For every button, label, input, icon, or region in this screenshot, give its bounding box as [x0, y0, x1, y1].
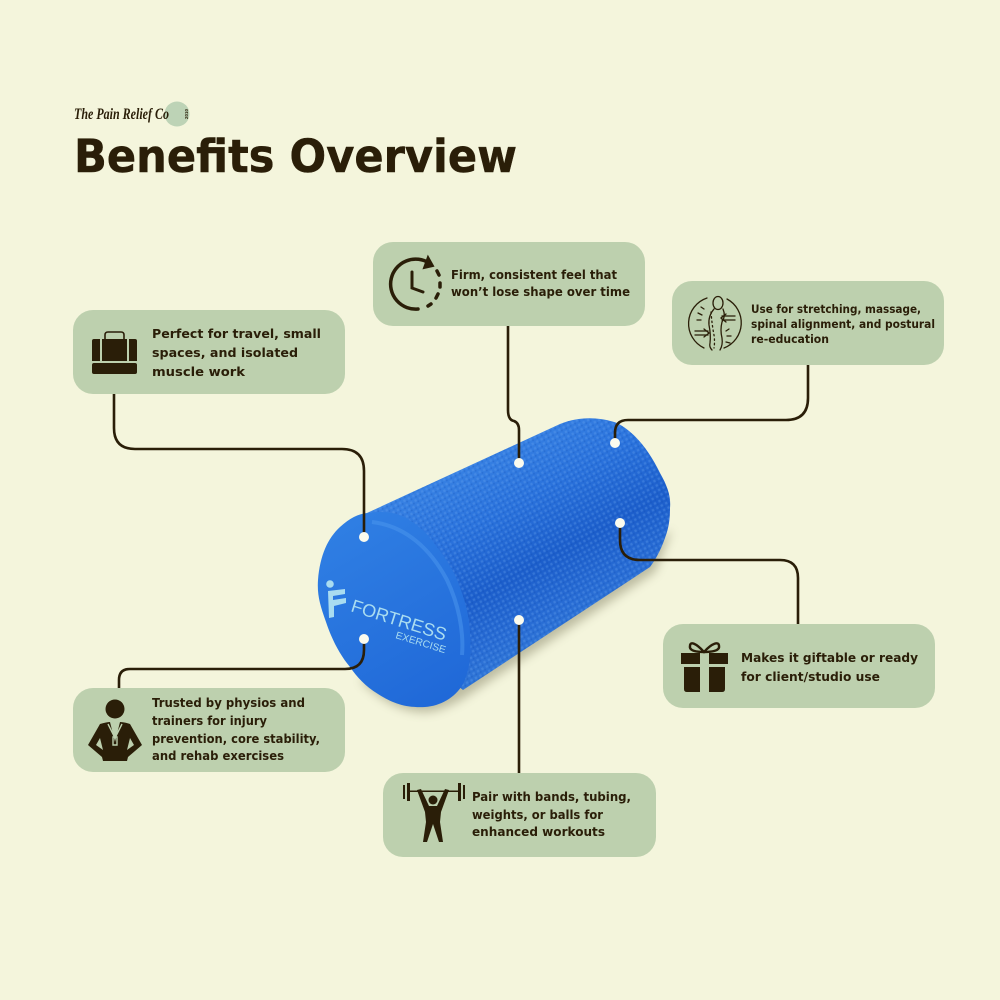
- text: pair with weights: weights, or balls for: [472, 807, 604, 822]
- panel: gift: [663, 624, 935, 708]
- text: pair with weights: enhanced workouts: [472, 824, 605, 839]
- text: travel: spaces, and isolated: [152, 345, 298, 360]
- text: stretching: [751, 302, 935, 346]
- icon: spine: [689, 296, 741, 350]
- connector: travel: [114, 394, 364, 537]
- text: trusted: Trusted by physios and: [152, 695, 305, 710]
- text: travel: Perfect for travel, small: [152, 326, 321, 341]
- text: stretching: re-education: [751, 332, 829, 346]
- text: pair with weights: [472, 789, 631, 839]
- text: firm feel: Firm, consistent feel that: [451, 267, 617, 282]
- icon: clock: [391, 257, 440, 309]
- connector: gift: [620, 523, 798, 624]
- panel: trusted: [73, 688, 345, 772]
- panel: firm feel: [373, 242, 645, 326]
- text: trusted: and rehab exercises: [152, 748, 284, 763]
- brand logo: 2010: [184, 108, 189, 119]
- panel: travel: [73, 310, 345, 394]
- text: gift: Makes it giftable or ready: [741, 650, 918, 665]
- connector lines: [114, 326, 808, 773]
- icon: trainer with medal: [88, 700, 142, 761]
- brand logo: [74, 102, 190, 126]
- text: trusted: [152, 695, 320, 763]
- text: travel: muscle work: [152, 364, 246, 379]
- text: firm feel: [451, 267, 630, 299]
- icon: briefcase: [92, 332, 137, 374]
- connector: firm feel: [508, 326, 519, 463]
- icon: weightlifter: [403, 783, 465, 842]
- text: trusted: prevention, core stability,: [152, 731, 320, 746]
- roller texture: [367, 418, 670, 690]
- manufacturer logo: EXERCISE: [394, 630, 447, 656]
- roller end cap: [318, 512, 470, 707]
- icon: gift box: [681, 643, 728, 692]
- foam roller: [318, 418, 672, 712]
- text: firm feel: won’t lose shape over time: [451, 284, 630, 299]
- panel: pair with weights: [383, 773, 656, 857]
- manufacturer logo: FORTRESS: [349, 596, 449, 645]
- connector: stretching: [615, 365, 808, 443]
- text: gift: for client/studio use: [741, 669, 880, 684]
- manufacturer logo: [326, 580, 449, 656]
- cap rim highlight: [372, 522, 462, 655]
- text: travel: [152, 326, 321, 379]
- text: trusted: trainers for injury: [152, 713, 267, 728]
- text: pair with weights: Pair with bands, tubing,: [472, 789, 631, 804]
- text: stretching: Use for stretching, massage,: [751, 302, 921, 316]
- roller body: [367, 418, 670, 690]
- text: stretching: spinal alignment, and postural: [751, 317, 935, 331]
- panel: stretching: [672, 281, 944, 365]
- connector: trusted: [119, 639, 364, 688]
- connector dots: [359, 438, 625, 644]
- brand logo: The Pain Relief Co: [74, 106, 169, 123]
- title: Benefits Overview: [74, 130, 517, 183]
- connector: pair: [518, 620, 520, 773]
- text: gift: [741, 650, 918, 684]
